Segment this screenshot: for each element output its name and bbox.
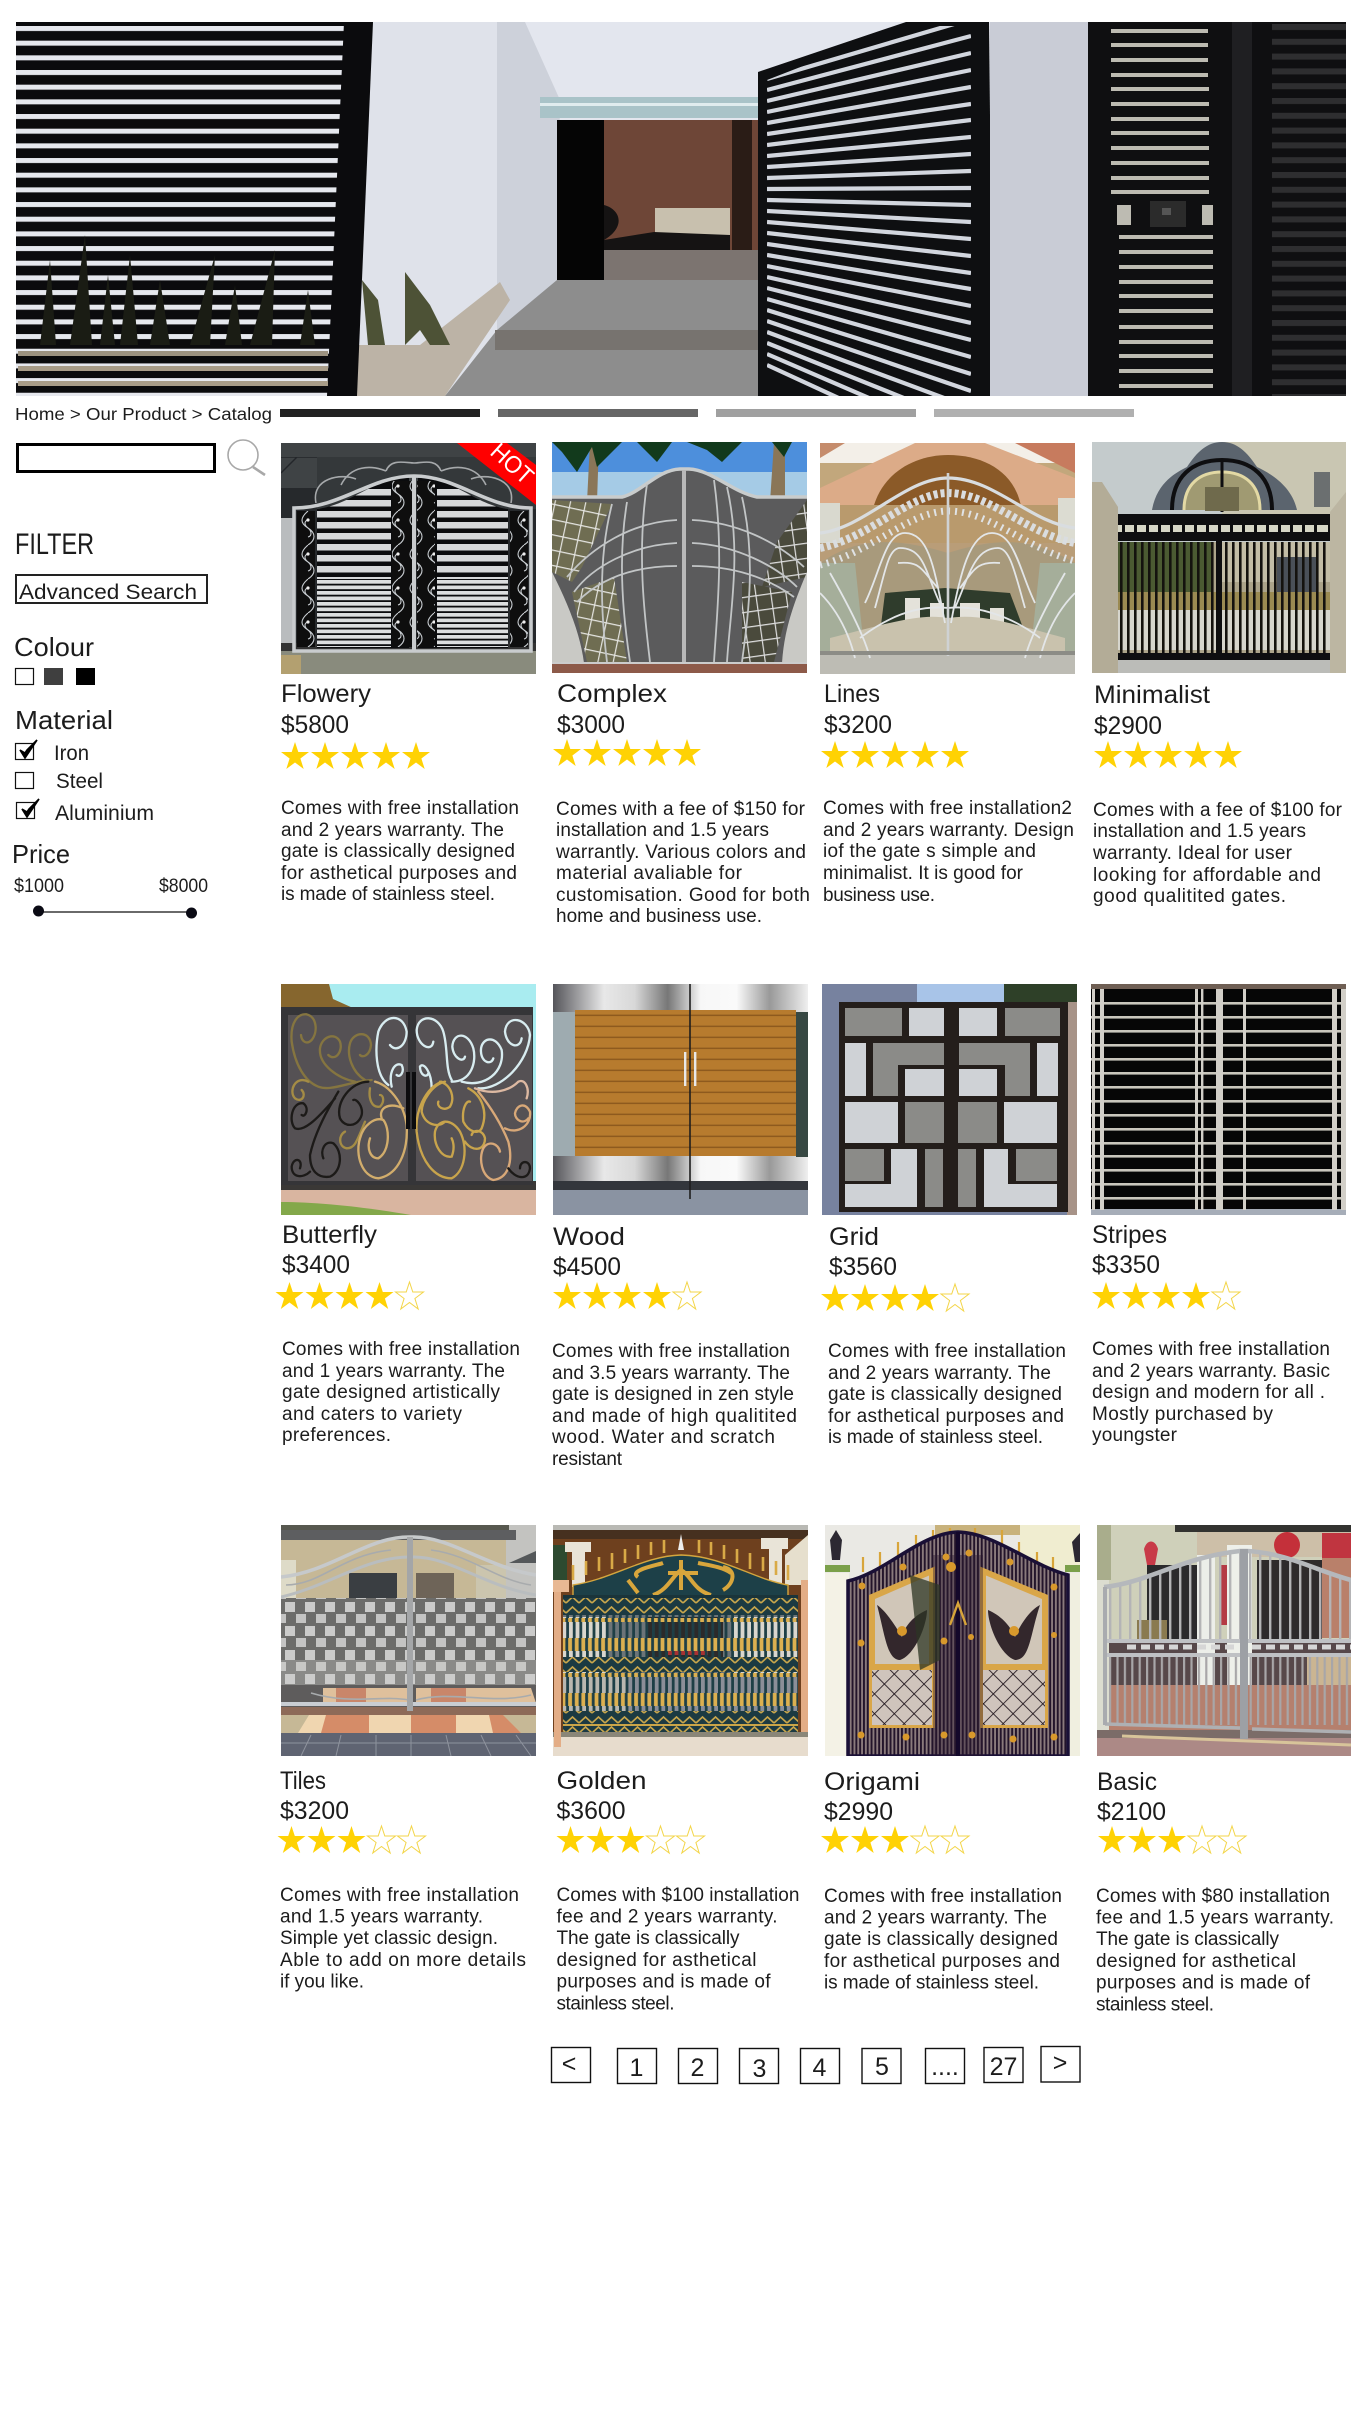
description: material avaliable for bbox=[556, 863, 743, 884]
description: and 2 years warranty. The bbox=[281, 820, 504, 841]
page 3: 3 bbox=[753, 2055, 766, 2083]
product image: wood gate bbox=[553, 984, 808, 1215]
description: and 2 years warranty. The bbox=[824, 1908, 1047, 1929]
colour label: Colour bbox=[14, 632, 94, 662]
description: designed for asthetical bbox=[556, 1950, 756, 1971]
description: installation and 1.5 years bbox=[1093, 821, 1306, 842]
description: purposes and is made of bbox=[1096, 1973, 1311, 1994]
product image: golden gate bbox=[553, 1525, 808, 1756]
description: and caters to variety bbox=[282, 1404, 462, 1425]
rating: five stars bbox=[1094, 741, 1242, 768]
rating: four stars bbox=[276, 1282, 424, 1309]
description: is made of stainless steel. bbox=[828, 1427, 1043, 1448]
advanced search button bbox=[16, 575, 207, 604]
pagination bbox=[552, 2046, 1080, 2084]
description: Comes with free installation bbox=[552, 1341, 790, 1362]
product card: Golden bbox=[553, 1525, 808, 2014]
description: Comes with free installation2 bbox=[823, 798, 1072, 819]
price: $3600 bbox=[556, 1797, 626, 1825]
rating: five stars bbox=[553, 739, 701, 766]
product name: Butterfly bbox=[282, 1221, 378, 1249]
description: for asthetical purposes and bbox=[828, 1406, 1064, 1427]
description: Comes with a fee of $100 for bbox=[1093, 800, 1343, 821]
rating: three stars bbox=[278, 1826, 426, 1853]
description bbox=[281, 798, 519, 905]
page ellipsis bbox=[926, 2048, 964, 2084]
product image: minimalist gate bbox=[1092, 442, 1346, 673]
price label: Price bbox=[12, 839, 70, 869]
description: for asthetical purposes and bbox=[281, 863, 517, 884]
product card: Minimalist bbox=[1092, 442, 1346, 907]
next page button: > bbox=[1053, 2049, 1067, 2077]
price: $3200 bbox=[824, 711, 892, 739]
product name: Tiles bbox=[280, 1767, 326, 1795]
previous page button: < bbox=[562, 2050, 576, 2078]
description: good qualitited gates. bbox=[1093, 886, 1286, 907]
description bbox=[823, 798, 1074, 906]
price: $4500 bbox=[553, 1253, 621, 1281]
page 1 bbox=[618, 2048, 656, 2084]
description: and 1.5 years warranty. bbox=[280, 1907, 483, 1928]
description: and 3.5 years warranty. The bbox=[552, 1363, 790, 1384]
description: business use. bbox=[823, 885, 935, 906]
hot ribbon bbox=[457, 438, 539, 505]
description: gate is classically designed bbox=[828, 1384, 1062, 1405]
checkbox: iron: Iron bbox=[54, 742, 89, 765]
product image: lines gate bbox=[820, 443, 1075, 674]
description: iof the gate s simple and bbox=[823, 841, 1036, 862]
page 5: 5 bbox=[875, 2053, 889, 2081]
price slider bbox=[33, 906, 197, 918]
description bbox=[556, 1885, 800, 2014]
description: looking for affordable and bbox=[1093, 865, 1321, 886]
material label: Material bbox=[15, 705, 113, 735]
description: Comes with $80 installation bbox=[1096, 1886, 1330, 1907]
rating: four stars bbox=[1092, 1282, 1240, 1309]
product name: Complex bbox=[557, 680, 668, 708]
product card: Grid bbox=[821, 984, 1077, 1448]
product card: Butterfly bbox=[276, 984, 536, 1446]
product image: stripes gate bbox=[1091, 984, 1346, 1215]
description: Comes with free installation bbox=[280, 1885, 519, 1906]
product card: Stripes bbox=[1091, 984, 1346, 1446]
rating: three stars bbox=[821, 1826, 969, 1853]
description: and 2 years warranty. Basic bbox=[1092, 1361, 1330, 1382]
progress bars bbox=[280, 409, 1134, 417]
price range maximum: $8000 bbox=[159, 876, 208, 897]
description bbox=[1092, 1339, 1330, 1446]
product name: Wood bbox=[553, 1223, 625, 1251]
page 2 bbox=[678, 2048, 718, 2084]
price: $3400 bbox=[282, 1251, 350, 1279]
search box bbox=[18, 444, 214, 472]
product name: Origami bbox=[824, 1768, 920, 1796]
colour swatches bbox=[16, 668, 95, 685]
description: The gate is classically bbox=[1096, 1929, 1280, 1950]
description: resistant bbox=[552, 1449, 623, 1470]
description: design and modern for all . bbox=[1092, 1382, 1325, 1403]
description bbox=[1092, 800, 1343, 907]
rating: five stars bbox=[821, 741, 969, 768]
description: Comes with free installation bbox=[1092, 1339, 1330, 1360]
description: preferences. bbox=[282, 1425, 391, 1446]
description: and 2 years warranty. The bbox=[828, 1363, 1051, 1384]
description: is made of stainless steel. bbox=[824, 1973, 1039, 1994]
description: stainless steel. bbox=[556, 1993, 674, 2014]
description: Able to add on more details bbox=[280, 1950, 526, 1971]
product image: complex gate bbox=[552, 442, 807, 673]
page 1: 1 bbox=[630, 2054, 643, 2082]
page 5 bbox=[862, 2048, 901, 2084]
description: and 2 years warranty. Design bbox=[823, 820, 1074, 841]
price: $3350 bbox=[1092, 1251, 1160, 1279]
description: warrantly. Various colors and bbox=[555, 842, 806, 863]
hero banner photo of black slatted gate bbox=[16, 22, 1346, 396]
description bbox=[555, 799, 810, 927]
page ellipsis: .... bbox=[931, 2053, 959, 2081]
price: $3560 bbox=[829, 1253, 897, 1281]
description bbox=[828, 1341, 1066, 1448]
page 2: 2 bbox=[691, 2054, 704, 2082]
description: stainless steel. bbox=[1096, 1994, 1214, 2015]
checkbox: iron bbox=[16, 740, 89, 765]
product name: Basic bbox=[1097, 1768, 1157, 1796]
description: customisation. Good for both bbox=[556, 885, 810, 906]
product card: Flowery bbox=[281, 438, 539, 905]
description: gate is classically designed bbox=[281, 841, 515, 862]
description bbox=[282, 1339, 520, 1446]
product card: Lines bbox=[820, 443, 1075, 906]
product card: Tiles bbox=[278, 1525, 536, 1993]
description: if you like. bbox=[280, 1972, 364, 1993]
description: gate is designed in zen style bbox=[552, 1384, 794, 1405]
price: $3000 bbox=[557, 711, 625, 739]
price: $3200 bbox=[280, 1797, 349, 1825]
description: Comes with a fee of $150 for bbox=[556, 799, 806, 820]
product card: Complex bbox=[552, 442, 810, 927]
description: home and business use. bbox=[556, 906, 762, 927]
description: gate designed artistically bbox=[282, 1382, 500, 1403]
product image: flowery gate bbox=[281, 438, 539, 674]
icon: magnifying glass bbox=[228, 440, 265, 475]
product image: origami gate bbox=[825, 1525, 1080, 1756]
description: Comes with free installation bbox=[281, 798, 519, 819]
description: is made of stainless steel. bbox=[281, 884, 495, 905]
description: Mostly purchased by bbox=[1092, 1404, 1274, 1425]
description: and 1 years warranty. The bbox=[282, 1361, 505, 1382]
product name: Golden bbox=[556, 1767, 646, 1795]
page 27: 27 bbox=[990, 2053, 1017, 2081]
rating: three stars bbox=[1098, 1826, 1246, 1853]
description: Simple yet classic design. bbox=[280, 1928, 498, 1949]
description: installation and 1.5 years bbox=[556, 820, 769, 841]
rating: three stars bbox=[556, 1826, 704, 1853]
product card: Basic bbox=[1096, 1525, 1351, 2015]
description: warranty. Ideal for user bbox=[1092, 843, 1293, 864]
description: youngster bbox=[1092, 1425, 1178, 1446]
page 3 bbox=[740, 2048, 778, 2084]
description bbox=[1096, 1886, 1334, 2015]
product name: Stripes bbox=[1092, 1221, 1167, 1249]
heading: filter: FILTER bbox=[15, 528, 94, 561]
product image: basic gate bbox=[1097, 1525, 1351, 1756]
product card: Wood bbox=[551, 984, 808, 1470]
price: $2990 bbox=[824, 1798, 893, 1826]
checkbox: aluminium bbox=[16, 799, 154, 825]
rating: five stars bbox=[281, 742, 430, 769]
sidebar panel: search and filter bbox=[12, 440, 265, 918]
rating: four stars bbox=[821, 1284, 969, 1311]
product image: butterfly gate bbox=[281, 984, 536, 1215]
price: $2100 bbox=[1097, 1798, 1166, 1826]
description: wood. Water and scratch bbox=[551, 1427, 775, 1448]
product image: grid gate bbox=[822, 984, 1077, 1215]
page 4: 4 bbox=[813, 2054, 827, 2082]
price: $2900 bbox=[1094, 712, 1162, 740]
product image: tiles gate bbox=[281, 1525, 536, 1756]
product card: Origami bbox=[821, 1525, 1080, 1994]
description: Comes with $100 installation bbox=[556, 1885, 800, 1906]
description: Comes with free installation bbox=[282, 1339, 520, 1360]
checkbox: aluminium: Aluminium bbox=[55, 802, 154, 825]
description: designed for asthetical bbox=[1096, 1951, 1296, 1972]
description: gate is classically designed bbox=[824, 1929, 1058, 1950]
previous page button bbox=[552, 2048, 590, 2082]
description: fee and 2 years warranty. bbox=[556, 1907, 778, 1928]
price range minimum: $1000 bbox=[14, 876, 64, 897]
description bbox=[551, 1341, 797, 1470]
checkbox: steel bbox=[16, 770, 103, 793]
description bbox=[824, 1886, 1062, 1994]
description: Comes with free installation bbox=[828, 1341, 1066, 1362]
page 4 bbox=[800, 2048, 840, 2084]
product name: Grid bbox=[829, 1223, 879, 1251]
page 27 bbox=[984, 2048, 1023, 2082]
product name: Minimalist bbox=[1094, 681, 1210, 709]
description: minimalist. It is good for bbox=[823, 863, 1024, 884]
description bbox=[280, 1885, 526, 1993]
next page button bbox=[1041, 2046, 1080, 2082]
product name: Flowery bbox=[281, 680, 372, 708]
description: and made of high qualitited bbox=[552, 1406, 797, 1427]
description: Comes with free installation bbox=[824, 1886, 1062, 1907]
description: purposes and is made of bbox=[556, 1972, 771, 1993]
description: for asthetical purposes and bbox=[824, 1951, 1060, 1972]
checkbox: steel: Steel bbox=[56, 770, 103, 793]
breadcrumb: Home > Our Product > Catalog bbox=[15, 404, 272, 424]
advanced search button: Advanced Search bbox=[19, 581, 197, 604]
product name: Lines bbox=[824, 680, 880, 708]
price: $5800 bbox=[281, 711, 349, 739]
description: fee and 1.5 years warranty. bbox=[1096, 1908, 1334, 1929]
rating: four stars bbox=[553, 1282, 701, 1309]
description: The gate is classically bbox=[556, 1928, 740, 1949]
